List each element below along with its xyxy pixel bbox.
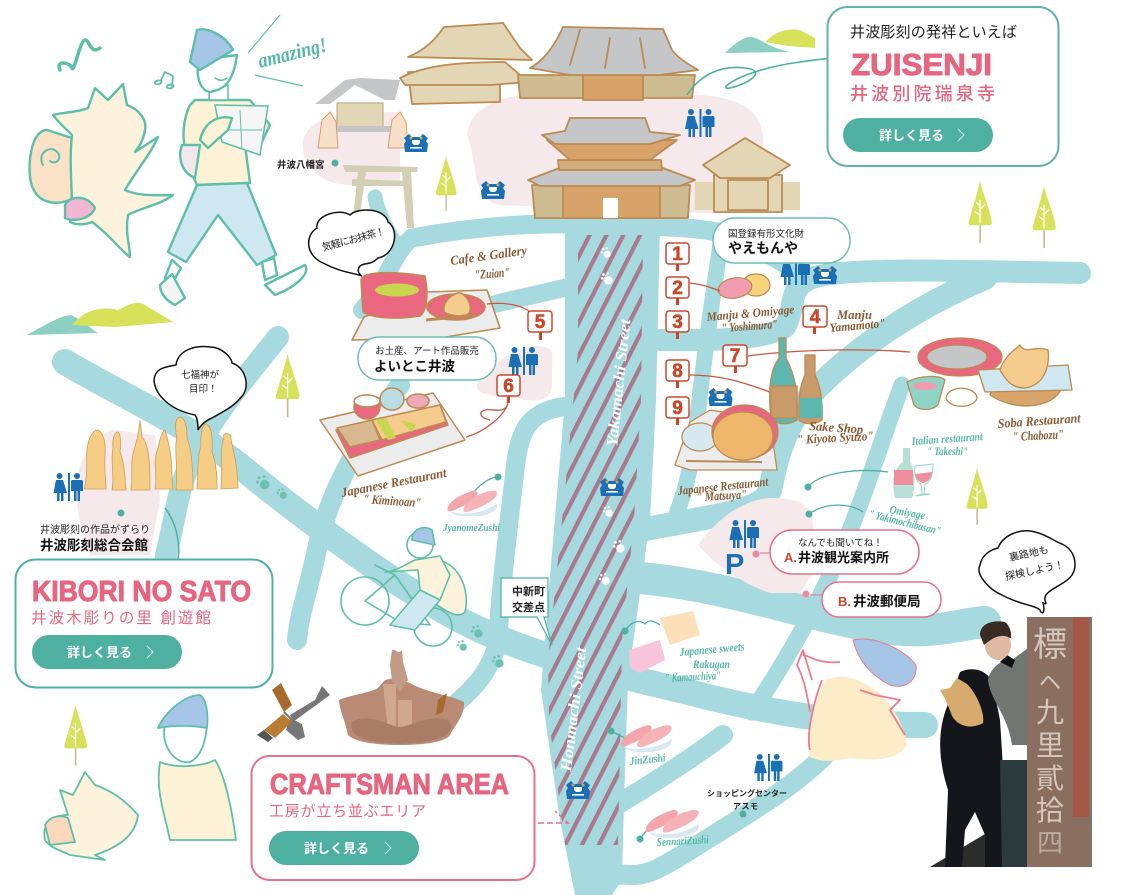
pill: tourist information A <box>752 530 919 574</box>
label: shopping center Asumo <box>707 788 787 818</box>
icons: restrooms <box>54 109 810 781</box>
marker signs 1-9: 8 <box>672 361 683 382</box>
label: Italian Takeshi <box>911 431 984 458</box>
photo: man with puppet beside stone pillar: 九 <box>1036 697 1064 728</box>
label: Sennari Zushi <box>636 810 710 849</box>
paw prints <box>256 247 625 668</box>
bubble: seven lucky gods landmark <box>154 347 246 430</box>
label: cafe Zuian <box>449 242 528 282</box>
illustration: dog dancing <box>30 84 173 257</box>
pill: Yaemonya: やえもんや <box>728 240 798 256</box>
icon: torii gate <box>343 165 418 228</box>
pill: tourist information A: 井波観光案内所 <box>798 550 889 565</box>
label: sculpture hall <box>40 508 179 568</box>
label: Jin Zushi <box>608 725 672 768</box>
label: Inami Hachimangu: 井波八幡宮 <box>277 159 325 171</box>
bubble: explore back alleys <box>979 531 1075 613</box>
pill: Yoitoko Inami: よいとこ井波 <box>374 358 455 374</box>
card: Craftsman Area: CRAFTSMAN AREA <box>270 769 509 801</box>
illustration: Matsuya meal <box>675 405 778 470</box>
label: cafe Zuian: "Zuian" <box>474 265 510 282</box>
marker signs 1-9: 7 <box>730 346 740 367</box>
pill: post office B: 井波郵便局 <box>853 593 920 609</box>
photo: man with puppet beside stone pillar: 四 <box>1037 828 1063 858</box>
illustration: character from behind with hat <box>797 639 916 761</box>
bubble: seven lucky gods landmark: 目印！ <box>189 383 218 395</box>
photo: man with puppet beside stone pillar <box>930 617 1092 867</box>
label: intersection Nakashinmachi: 交差点 <box>512 600 545 614</box>
label: Soba Chabozu: " Chabozu" <box>1012 426 1064 444</box>
pill: Yaemonya: 国登録有形文化財 <box>728 228 805 240</box>
card: Craftsman Area <box>252 756 534 880</box>
trees <box>64 156 1056 766</box>
dashed connector to Craftsman Area <box>538 811 568 823</box>
pink zones <box>77 93 815 593</box>
illustration: sake bottles <box>770 338 822 424</box>
label: Jin Zushi: JinZushi <box>628 752 667 768</box>
label: Yoshimura <box>705 302 795 335</box>
label: Japanese Restaurant Kiminoan: " Kiminoan" <box>363 491 422 510</box>
label: Soba Chabozu: Soba Restaurant <box>997 410 1081 431</box>
marker signs 1-9: 3 <box>672 312 683 333</box>
stripes: Yakamachi and Honmachi streets <box>548 235 643 845</box>
pill: post office B <box>802 582 941 617</box>
marker signs 1-9 <box>497 243 827 425</box>
label: Zuian speech bubble: 気軽にお抹茶！ <box>320 225 387 254</box>
illustration: bento at Kiminoan <box>320 388 465 476</box>
label: Japanese Restaurant Kiminoan: Japanese Restaurant <box>339 465 448 500</box>
label: intersection Nakashinmachi: 中新町 <box>512 584 545 598</box>
photo: man with puppet beside stone pillar: 里 <box>1036 730 1064 761</box>
road network <box>65 197 1080 895</box>
pill: post office B: B. <box>838 594 851 609</box>
pill: tourist information A: なんでも聞いてね！ <box>798 538 883 549</box>
marker signs 1-9: 9 <box>672 398 683 419</box>
amazing lines <box>248 15 303 86</box>
illustration: carving tools <box>257 683 330 742</box>
icon: parking P: P <box>725 549 744 581</box>
card: Kibori no Sato <box>16 560 272 688</box>
card: Kibori no Sato: 井波木彫りの里 創遊館 <box>31 609 211 627</box>
label: intersection Nakashinmachi <box>501 578 552 645</box>
bubble: explore back alleys: 裏路地も <box>1008 543 1050 564</box>
lines: markers 2, 7, 8 <box>690 283 910 392</box>
street name: Yakamachi Street: Yakamachi Street <box>604 318 634 447</box>
hills top <box>725 30 815 53</box>
illustration: matcha and manju tray <box>352 273 500 340</box>
label: Omiyage Yakimochibasan: " Yakimochibasan" <box>867 508 942 538</box>
label: Sake Shop: Sake Shop <box>809 418 864 437</box>
label: Omiyage Yakimochibasan <box>867 504 942 538</box>
card: Craftsman Area: 詳しく見る <box>304 841 369 856</box>
label: Rakugan sweets: " Kamauchiya" <box>664 668 721 685</box>
bubble: explore back alleys: 探検しよう！ <box>1004 558 1065 583</box>
card: Kibori no Sato: 詳しく見る <box>67 645 132 660</box>
label: Matsuya <box>676 475 769 504</box>
label: Jyanome Zushi sushi <box>442 474 502 534</box>
label: shopping center Asumo: アスモ <box>733 802 758 811</box>
label: Manju Yamamoto <box>829 307 886 335</box>
card: Zuisenji: 井波別院瑞泉寺 <box>850 84 995 104</box>
bubble: seven lucky gods landmark: 七福神が <box>181 369 220 381</box>
card: Craftsman Area: 工房が立ち並ぶエリア <box>269 803 426 820</box>
label: Jyanome Zushi sushi: JyanomeZushi <box>442 522 501 534</box>
pill: tourist information A: A. <box>784 550 797 565</box>
illustration: seven lucky gods statues <box>84 417 238 490</box>
marker signs 1-9: 5 <box>535 312 546 333</box>
label: Italian Takeshi: " Takeshi" <box>927 446 968 458</box>
card: Zuisenji: ZUISENJI <box>851 47 992 82</box>
marker signs 1-9: 6 <box>503 376 514 397</box>
label: Omiyage Yakimochibasan: Omiyage <box>888 504 926 522</box>
photo: man with puppet beside stone pillar: 拾 <box>1036 795 1064 826</box>
photo: man with puppet beside stone pillar: ヘ <box>1039 670 1061 695</box>
amazing text: amazing! <box>255 33 329 73</box>
card: Zuisenji: 井波彫刻の発祥といえば <box>850 24 1017 41</box>
pill: Yoitoko Inami: お土産、アート作品販売 <box>375 345 479 357</box>
label: sculpture hall: 井波彫刻の作品がずらり <box>40 523 150 536</box>
illustration: soba set <box>907 338 1072 410</box>
illustration: small traveller carving with dog <box>44 695 236 860</box>
label: Sake Shop: " Kiyoto Syuzo" <box>796 428 874 447</box>
pill: Yoitoko Inami <box>358 337 496 380</box>
marker signs 1-9: 1 <box>672 244 683 265</box>
street name: Honmachi Street: Honmachi Street <box>558 646 590 774</box>
label: cafe Zuian: Cafe & Gallery <box>449 242 528 268</box>
label: sculpture hall: 井波彫刻総合会館 <box>40 537 148 553</box>
label: Rakugan sweets: Japanese sweets <box>678 639 745 659</box>
label: Zuian speech bubble <box>309 210 395 276</box>
label: Sake Shop <box>796 418 874 447</box>
label: Sennari Zushi: SennariZushi <box>657 834 710 849</box>
icons: shishi mascots <box>404 134 837 799</box>
illustration: cyclist <box>341 528 466 646</box>
marker signs 1-9: 4 <box>810 307 821 328</box>
line to marker 6 <box>466 403 508 437</box>
marker signs 1-9: 2 <box>672 278 683 299</box>
illustration: wine bottle and glass <box>893 448 933 498</box>
leader lines with dots <box>804 471 888 518</box>
label: Soba Chabozu <box>997 410 1081 444</box>
card: Zuisenji <box>687 7 1058 166</box>
label: Yoshimura: " Yoshimura" <box>721 317 778 335</box>
label: Matsuya: " Matsuya" <box>696 487 747 504</box>
label: Manju Yamamoto: Manju <box>836 307 872 322</box>
hills left <box>27 303 173 335</box>
photo: man with puppet beside stone pillar: 標 <box>1033 626 1067 664</box>
label: Matsuya: Japanese Restaurant <box>676 475 769 498</box>
label: Rakugan sweets: Rakugan <box>692 657 730 671</box>
card: Kibori no Sato: KIBORI NO SATO <box>32 576 251 608</box>
illustration: Zuisenji temple complex <box>400 23 800 218</box>
label: Italian Takeshi: Italian restaurant <box>911 431 984 448</box>
label: Rakugan sweets <box>622 611 745 685</box>
pill: Yaemonya <box>713 218 850 263</box>
illustration: wooden sculpture <box>339 650 464 745</box>
card: Zuisenji: 詳しく見る <box>879 128 944 143</box>
label: shopping center Asumo: ショッピングセンター <box>707 788 787 798</box>
label: Manju Yamamoto: Yamamoto" <box>829 316 886 335</box>
label: Yoshimura: Manju & Omiyage <box>705 302 795 324</box>
line to marker 5 <box>487 303 530 312</box>
illustration: manju Yoshimura <box>717 274 770 301</box>
photo: man with puppet beside stone pillar: 貳 <box>1036 763 1064 794</box>
music notes <box>59 40 173 88</box>
illustration: walking traveller with map <box>160 29 306 305</box>
illustration: Inami Hachiman shrine <box>315 78 408 148</box>
